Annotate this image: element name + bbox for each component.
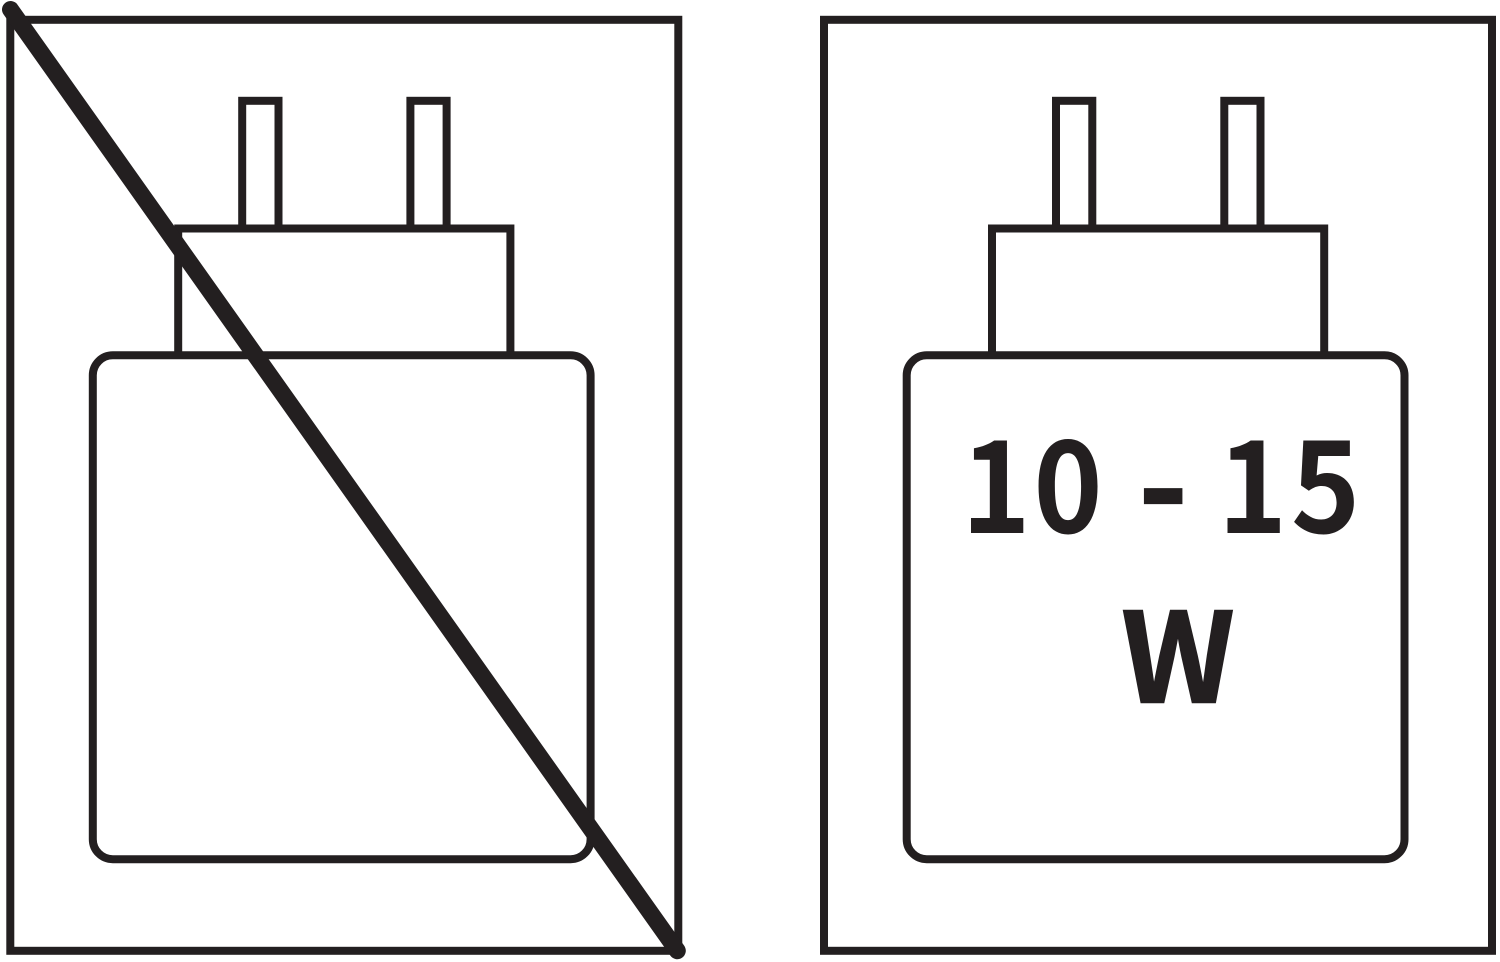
- strike-through line: [10, 10, 677, 951]
- label: wattage range: -: [1137, 365, 1189, 582]
- panel frame left: [10, 20, 678, 951]
- panel frame right: [824, 20, 1492, 951]
- icon: crossed-out charger: [93, 101, 591, 859]
- panel: 10-15 W charger: [824, 20, 1492, 951]
- label: wattage range: 10: [961, 388, 1129, 569]
- label: watt unit: W: [1121, 558, 1235, 738]
- icon: charger: [907, 101, 1404, 859]
- label: wattage range: 15: [1128, 388, 1360, 569]
- panel: no charger included: [10, 10, 678, 951]
